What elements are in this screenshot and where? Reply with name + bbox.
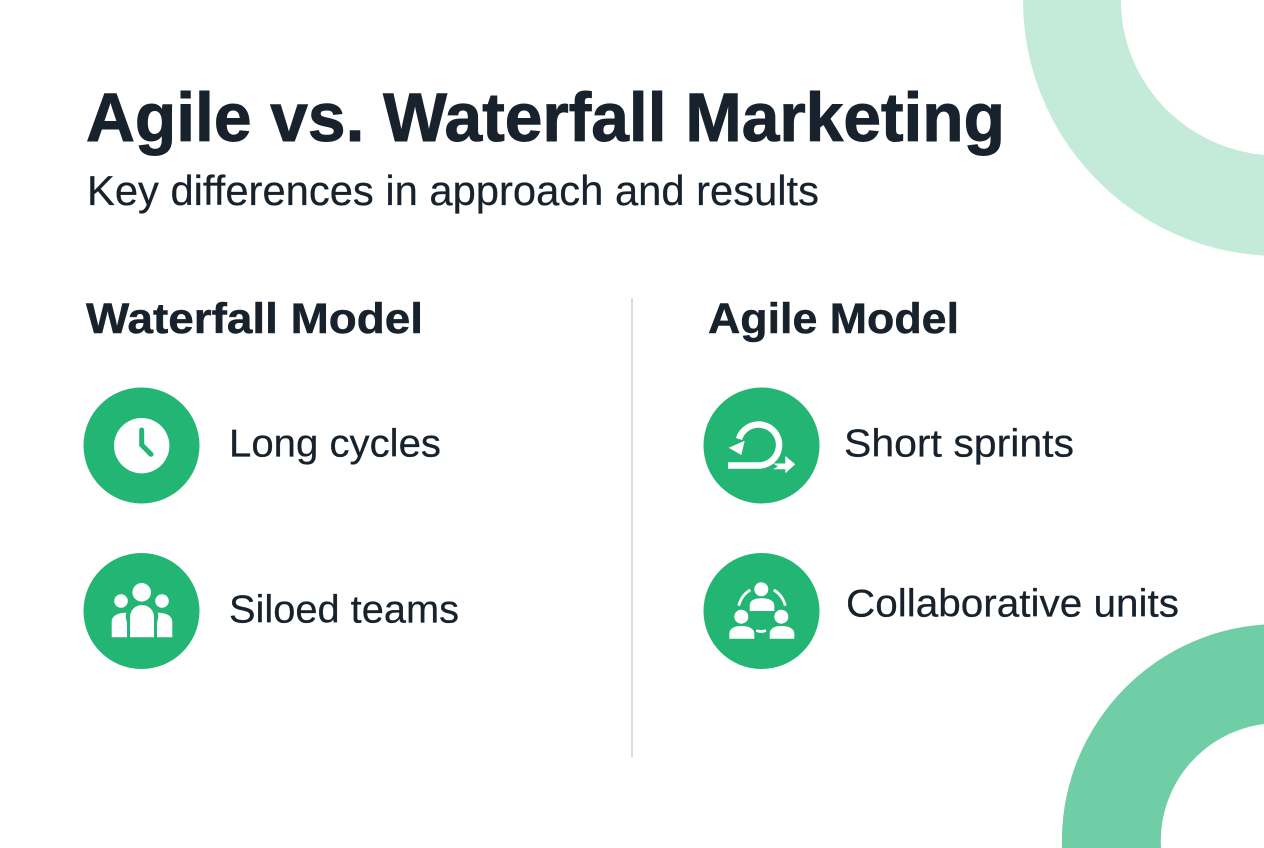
icon: sprint loop (704, 388, 820, 504)
decorative ring: top right (1023, 0, 1264, 256)
icon: team (84, 553, 200, 669)
label: Long cycles: Long cycles (229, 422, 441, 466)
panel: Waterfall Model (84, 295, 459, 669)
panel: Agile Model (704, 295, 1179, 669)
label: Short sprints: Short sprints (844, 422, 1074, 466)
label: Collaborative units: Collaborative units (846, 583, 1179, 626)
label: Siloed teams: Siloed teams (229, 588, 459, 632)
icon: collaborative team (704, 553, 820, 669)
column divider (631, 298, 633, 757)
heading: Agile Model: Agile Model (708, 295, 959, 343)
icon: clock (84, 388, 200, 504)
subtitle: Key differences in approach and results (87, 167, 819, 214)
heading: Waterfall Model: Waterfall Model (86, 295, 423, 343)
decorative ring: bottom right (1062, 624, 1264, 848)
title: Agile vs. Waterfall Marketing (86, 79, 1005, 156)
